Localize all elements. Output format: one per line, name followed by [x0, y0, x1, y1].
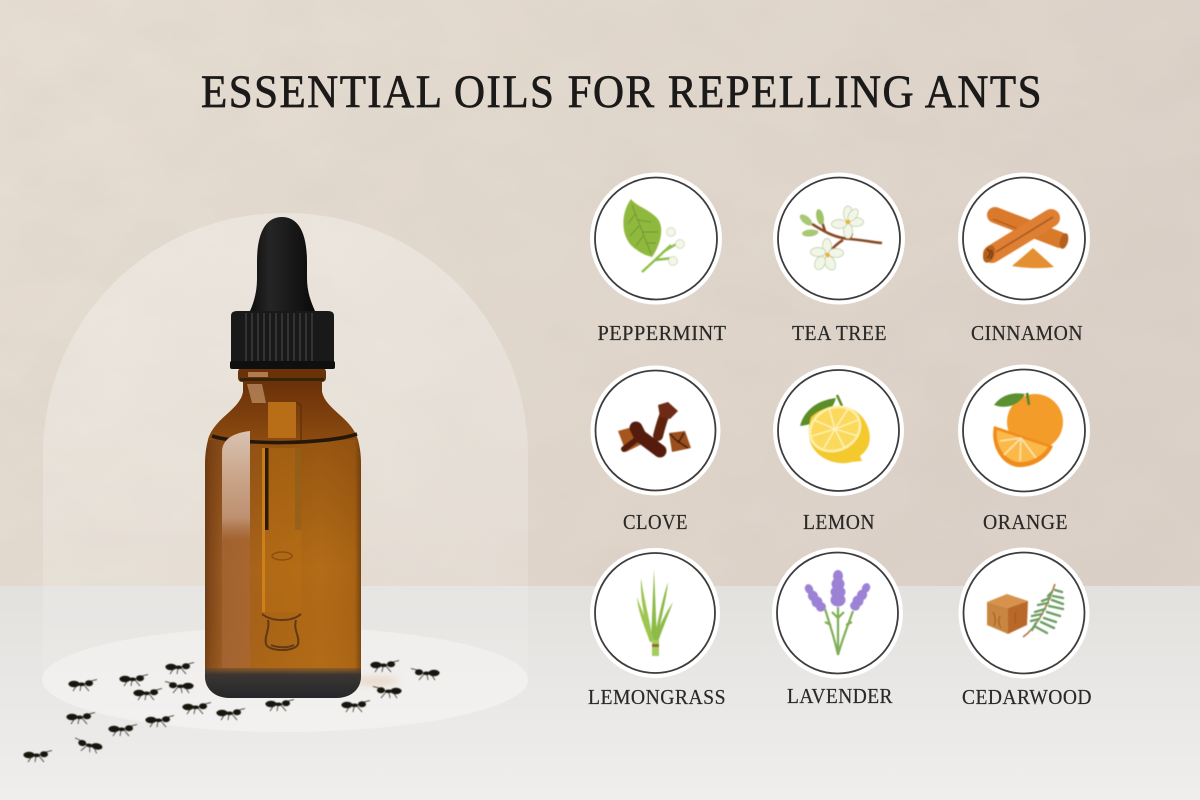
label: TEA TREE — [792, 321, 887, 345]
bottle neck — [238, 368, 326, 382]
icon: cloves — [618, 402, 691, 452]
label: CINNAMON — [971, 321, 1083, 345]
dome base ellipse — [42, 627, 528, 732]
panel: lemongrass — [588, 548, 726, 709]
panel: lavender — [772, 548, 903, 708]
table surface — [0, 586, 1200, 800]
icon: cinnamon sticks and powder — [981, 215, 1070, 268]
panel: peppermint — [590, 172, 726, 345]
icon: peppermint leaf — [623, 199, 684, 272]
glass highlight — [222, 431, 250, 540]
label: ORANGE — [983, 510, 1068, 534]
panel: cinnamon — [958, 172, 1090, 345]
panel: lemon — [773, 365, 904, 534]
amber floor glow — [351, 677, 399, 685]
panel: cedarwood — [958, 548, 1092, 709]
panel: orange — [958, 364, 1090, 534]
panel: clove — [590, 366, 720, 534]
bottle body — [205, 381, 361, 698]
label: LEMONGRASS — [588, 685, 726, 709]
darker glass shoulder — [208, 381, 358, 440]
screw collar — [230, 311, 335, 369]
panel: tea tree — [773, 172, 905, 345]
icon: tea tree branch — [798, 206, 882, 272]
dropper tube — [262, 402, 301, 650]
dark base glass — [205, 668, 361, 698]
icon: cedarwood cube and sprig — [987, 584, 1063, 637]
label: LAVENDER — [787, 684, 893, 708]
label: CLOVE — [623, 510, 688, 534]
icon: orange — [993, 393, 1063, 467]
amber dropper bottle — [205, 217, 399, 698]
icon: lavender — [803, 570, 872, 655]
liquid line — [212, 434, 357, 443]
background wall — [0, 0, 1200, 587]
label: LEMON — [803, 510, 875, 534]
icon: lemongrass — [637, 569, 673, 656]
icon: lemon — [800, 395, 870, 463]
dropper rubber bulb — [250, 217, 315, 311]
label: PEPPERMINT — [598, 321, 726, 345]
label: CEDARWOOD — [962, 685, 1092, 709]
title: ESSENTIAL OILS FOR REPELLING ANTS — [201, 66, 1043, 118]
ants — [23, 660, 440, 762]
glass dome — [42, 213, 528, 732]
